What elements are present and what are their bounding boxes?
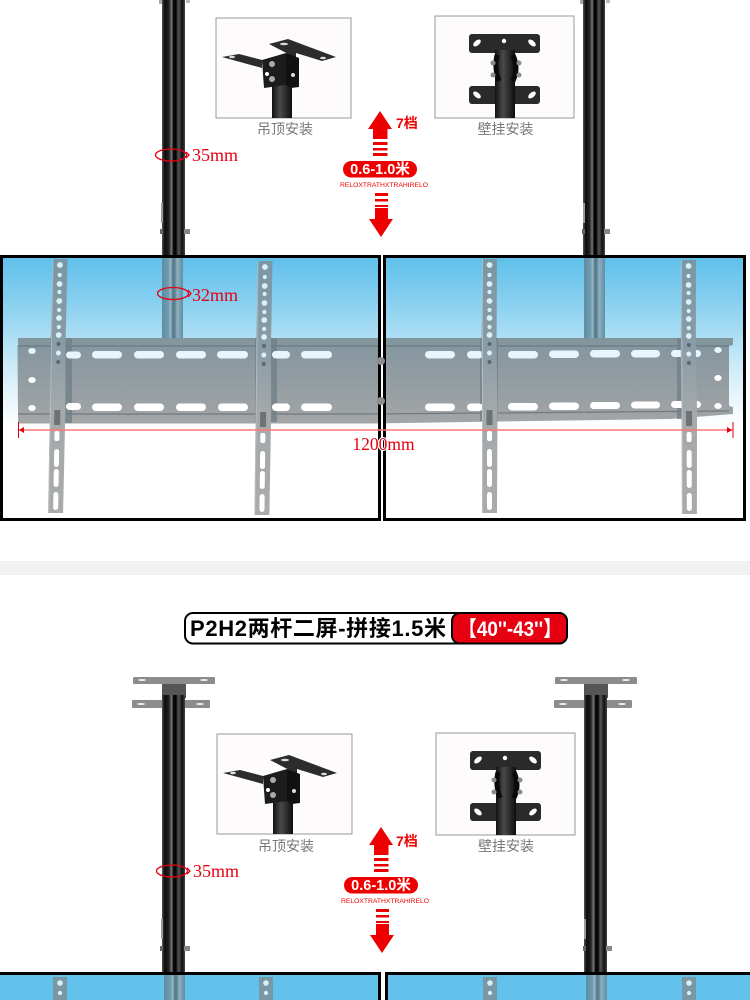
caption: ceiling mount: 吊顶安装	[257, 121, 313, 137]
width dimension line: 1200mm	[352, 434, 415, 454]
height adjustment arrow 2: 7档	[396, 833, 418, 849]
diameter label 35mm lower	[156, 861, 239, 881]
height adjustment arrow 2: 0.6-1.0米	[351, 877, 411, 894]
pole: lower left with bracket	[132, 677, 215, 973]
width dimension line	[18, 422, 733, 454]
inset: ceiling mount photo 2	[217, 734, 352, 834]
bracket arm 1	[48, 259, 68, 513]
height adjustment arrow: RELOXTRATHXTRAHIRELO	[340, 182, 428, 189]
height adjustment arrow 2	[341, 827, 429, 953]
height adjustment arrow	[340, 111, 428, 237]
lower screen contents	[53, 975, 696, 1000]
height adjustment arrow: 7档	[396, 115, 418, 131]
panel: lower left screen	[0, 972, 381, 1000]
pole: upper right	[580, 0, 610, 256]
title pill: P2H2两杆二屏-拼接1.5米	[190, 616, 446, 641]
bracket arm 4	[680, 260, 697, 514]
frame seam with bolts	[377, 255, 385, 521]
caption: wall mount: 壁挂安装	[478, 121, 534, 137]
caption: ceiling mount 2: 吊顶安装	[258, 838, 314, 854]
diameter label 35mm: 35mm	[192, 145, 238, 165]
height adjustment arrow: 0.6-1.0米	[350, 161, 410, 178]
lower screen frame edges	[0, 974, 750, 1000]
title pill	[185, 613, 567, 644]
tube seen through right screen	[584, 258, 605, 339]
diameter label 32mm	[158, 285, 238, 305]
mounting plate	[18, 338, 733, 424]
screen frames	[2, 256, 744, 520]
diameter label 35mm	[156, 145, 238, 165]
diameter label 32mm: 32mm	[192, 285, 238, 305]
pole: upper left	[159, 0, 190, 256]
title pill: 【40''-43''】	[458, 618, 562, 641]
inset: wall mount photo 2	[436, 733, 575, 835]
panel: left screen	[0, 255, 381, 521]
diameter label 35mm lower: 35mm	[193, 861, 239, 881]
tube seen through left screen	[162, 258, 183, 339]
inset: wall mount photo	[435, 16, 574, 118]
panel: lower right screen	[385, 972, 750, 1000]
panel: right screen	[383, 255, 746, 521]
bracket arm 2	[254, 261, 273, 515]
height adjustment arrow 2: RELOXTRATHXTRAHIRELO	[341, 898, 429, 905]
pole: lower right with bracket	[554, 677, 637, 973]
inset: ceiling mount photo	[216, 18, 351, 118]
caption: wall mount 2: 壁挂安装	[478, 838, 534, 854]
bracket arm 3	[482, 259, 498, 513]
section divider band	[0, 561, 750, 575]
